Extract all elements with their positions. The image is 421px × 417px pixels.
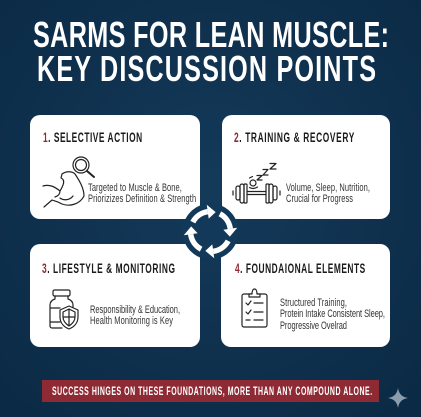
heading: lifestyle and monitoring: 3. LIFESTYLE & MONITORING: [42, 262, 175, 277]
heading: training and recovery: 2. TRAINING & RECOVERY: [234, 131, 355, 146]
title: [33, 15, 389, 89]
icon: sparkle: [388, 388, 408, 408]
icon: dumbbell and sleep: [233, 164, 280, 203]
text: training and recovery: Volume, Sleep, Nutrition,: [286, 180, 370, 193]
text: lifestyle and monitoring: [90, 302, 180, 326]
panel: foundational elements: [221, 244, 390, 347]
icon: bottle and shield: [50, 290, 78, 329]
text: selective action: [88, 180, 196, 204]
icon: cycle arrows: [182, 204, 238, 260]
text: lifestyle and monitoring: Health Monitoring is Key: [90, 313, 173, 326]
icon: clipboard checklist: [242, 289, 267, 327]
title: KEY DISCUSSION POINTS: [37, 49, 376, 89]
text: selective action: Priorizizes Definition & Strength: [88, 191, 196, 204]
panel: selective action: [30, 115, 200, 219]
title: SARMS FOR LEAN MUSCLE:: [33, 15, 389, 55]
callout banner: SUCCESS HINGES ON THESE FOUNDATIONS, MORE THAN ANY COMPOUND ALONE.: [52, 385, 372, 399]
text: foundational elements: Protein Intake Consistent Sleep,: [280, 306, 385, 319]
heading: foundational elements: 4. FOUNDAIONAL ELEMENTS: [235, 262, 366, 277]
text: foundational elements: Structured Training,: [280, 295, 347, 308]
text: foundational elements: Progressive Ovelrad: [280, 318, 347, 331]
text: training and recovery: [286, 180, 370, 204]
icon: flexed arm and magnifier: [43, 157, 94, 207]
text: selective action: Targeted to Muscle & Bone,: [88, 180, 182, 193]
callout banner: [42, 380, 379, 402]
text: lifestyle and monitoring: Responsibility & Education,: [90, 302, 180, 315]
panel: training and recovery: [222, 115, 390, 219]
text: foundational elements: [280, 295, 385, 331]
heading: selective action: 1. SELECTIVE ACTION: [43, 131, 142, 146]
panel: lifestyle and monitoring: [30, 244, 200, 347]
text: training and recovery: Crucial for Progress: [286, 191, 353, 204]
